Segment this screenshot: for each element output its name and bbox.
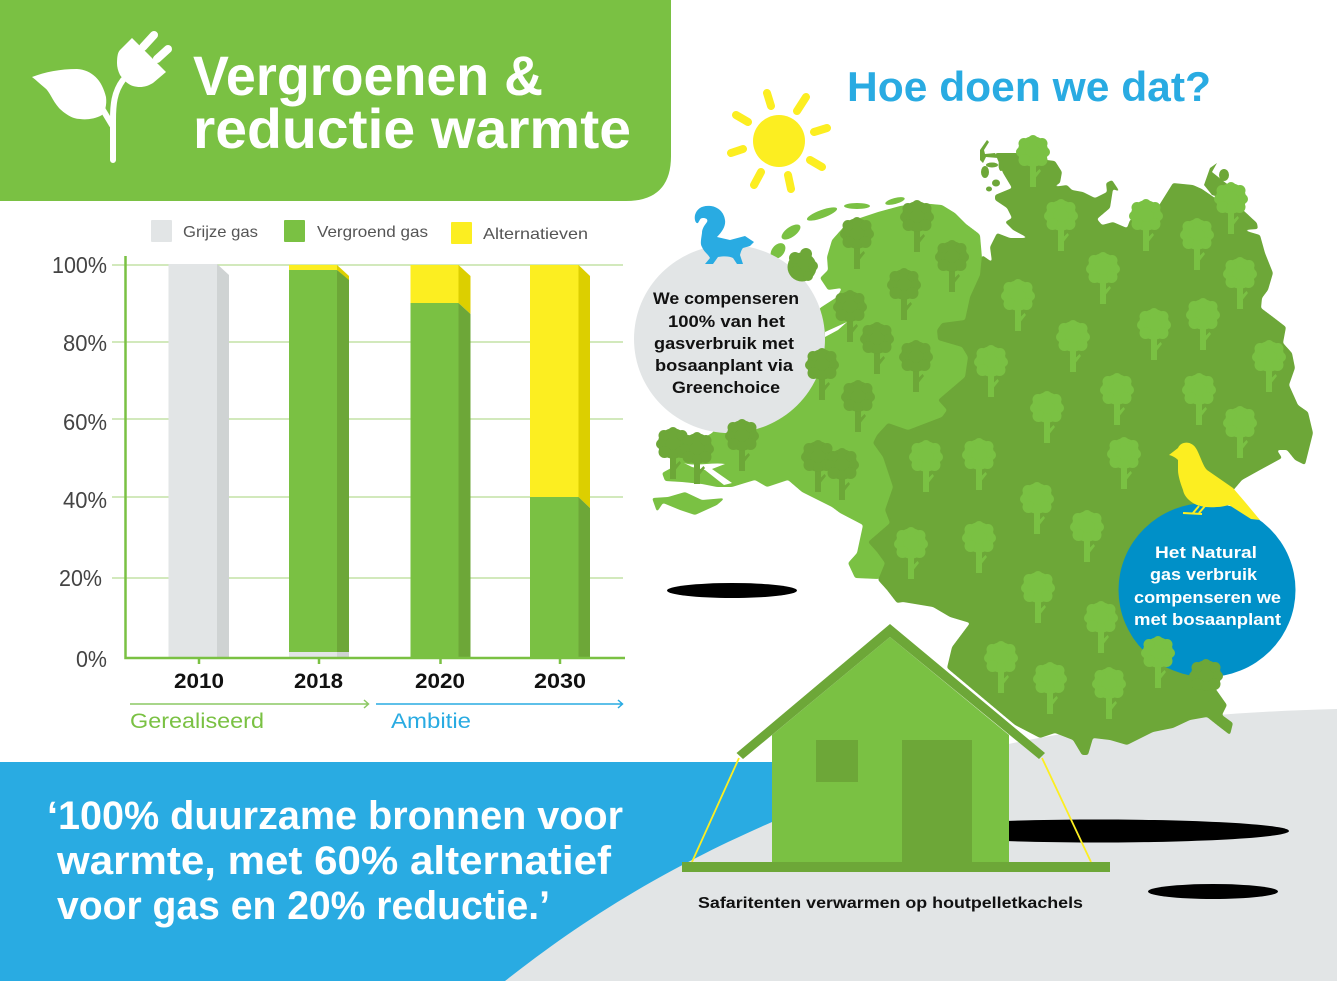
map of netherlands and germany xyxy=(652,140,1313,755)
floor xyxy=(682,862,1110,872)
wadden islands xyxy=(885,196,905,206)
blue bubble text xyxy=(1134,543,1281,629)
panel: blue bubble xyxy=(1118,503,1296,677)
trees on map xyxy=(656,135,1286,719)
heading: hoe doen we dat: Hoe doen we dat? xyxy=(847,63,1211,110)
black ellipse left xyxy=(667,583,797,598)
bottom band: blue background xyxy=(0,762,830,981)
germany xyxy=(868,140,1313,755)
icon: sun xyxy=(731,93,827,189)
x axis years: 2018 xyxy=(294,670,343,693)
dark trees xyxy=(656,200,1223,711)
title: reductie warmte xyxy=(193,97,631,160)
black ellipse large xyxy=(909,820,1289,842)
netherlands xyxy=(652,196,1000,579)
y axis labels: 0% xyxy=(76,646,107,672)
y axis labels: 60% xyxy=(63,409,107,435)
door xyxy=(902,740,972,862)
quote xyxy=(47,794,623,928)
grey bubble text: Greenchoice xyxy=(672,378,780,397)
icon: squirrel xyxy=(695,206,754,264)
house xyxy=(682,624,1110,872)
x axis years: 2020 xyxy=(415,670,465,693)
light trees xyxy=(894,135,1286,719)
grey bubble text: bosaanplant via xyxy=(655,356,794,375)
guy rope right xyxy=(1042,758,1091,862)
denmark fringe and islands xyxy=(980,140,998,163)
title xyxy=(193,44,631,160)
legend xyxy=(151,220,588,244)
legend: Grijze gas xyxy=(183,224,258,241)
grey bubble text xyxy=(653,289,799,397)
label: ambitie: Ambitie xyxy=(391,710,471,733)
y axis labels: 20% xyxy=(59,565,102,591)
legend: Vergroend gas xyxy=(317,224,428,241)
water inlets xyxy=(684,322,847,485)
blue bubble text: gas verbruik xyxy=(1150,565,1258,584)
roof xyxy=(736,624,1045,759)
x axis years: 2030 xyxy=(534,670,586,693)
grey bubble text: We compenseren xyxy=(653,289,799,308)
bar 2010 xyxy=(168,264,229,657)
quote: ‘100% duurzame bronnen voor xyxy=(47,794,623,838)
guy rope left xyxy=(692,758,739,862)
panel: grey bubble xyxy=(634,245,825,433)
x axis years: 2010 xyxy=(174,670,224,693)
icon: leaf and plug xyxy=(32,35,168,160)
quote: voor gas en 20% reductie.’ xyxy=(57,884,550,928)
quote: warmte, met 60% alternatief xyxy=(56,839,612,883)
bar chart xyxy=(52,252,625,733)
arrow: gerealiseerd xyxy=(130,700,368,708)
y axis labels: 80% xyxy=(63,330,107,356)
x axis years xyxy=(174,670,586,693)
arrow: ambitie xyxy=(376,700,622,708)
header panel xyxy=(0,0,671,201)
grey bubble text: gasverbruik met xyxy=(654,334,794,353)
house caption: Safaritenten verwarmen op houtpelletkachels xyxy=(698,895,1083,912)
blue bubble text: compenseren we xyxy=(1134,588,1281,607)
label: gerealiseerd: Gerealiseerd xyxy=(130,710,264,733)
y axis labels: 100% xyxy=(52,252,107,278)
y axis labels xyxy=(52,252,107,672)
icon: bird xyxy=(1169,443,1260,520)
legend: Alternatieven xyxy=(483,226,588,243)
blue bubble text: Het Natural xyxy=(1155,543,1257,562)
bar 2030 xyxy=(530,265,590,657)
bar 2020 xyxy=(410,265,470,657)
black ellipse bottom right xyxy=(1148,884,1278,899)
window xyxy=(816,740,858,782)
grey bubble text: 100% van het xyxy=(668,312,785,331)
y axis labels: 40% xyxy=(63,487,107,513)
house body xyxy=(772,637,1009,862)
bottom band: grey ground curve xyxy=(505,709,1337,981)
blue bubble text: met bosaanplant xyxy=(1134,610,1281,629)
title: Vergroenen & xyxy=(193,44,543,107)
bar 2018 xyxy=(289,265,349,657)
